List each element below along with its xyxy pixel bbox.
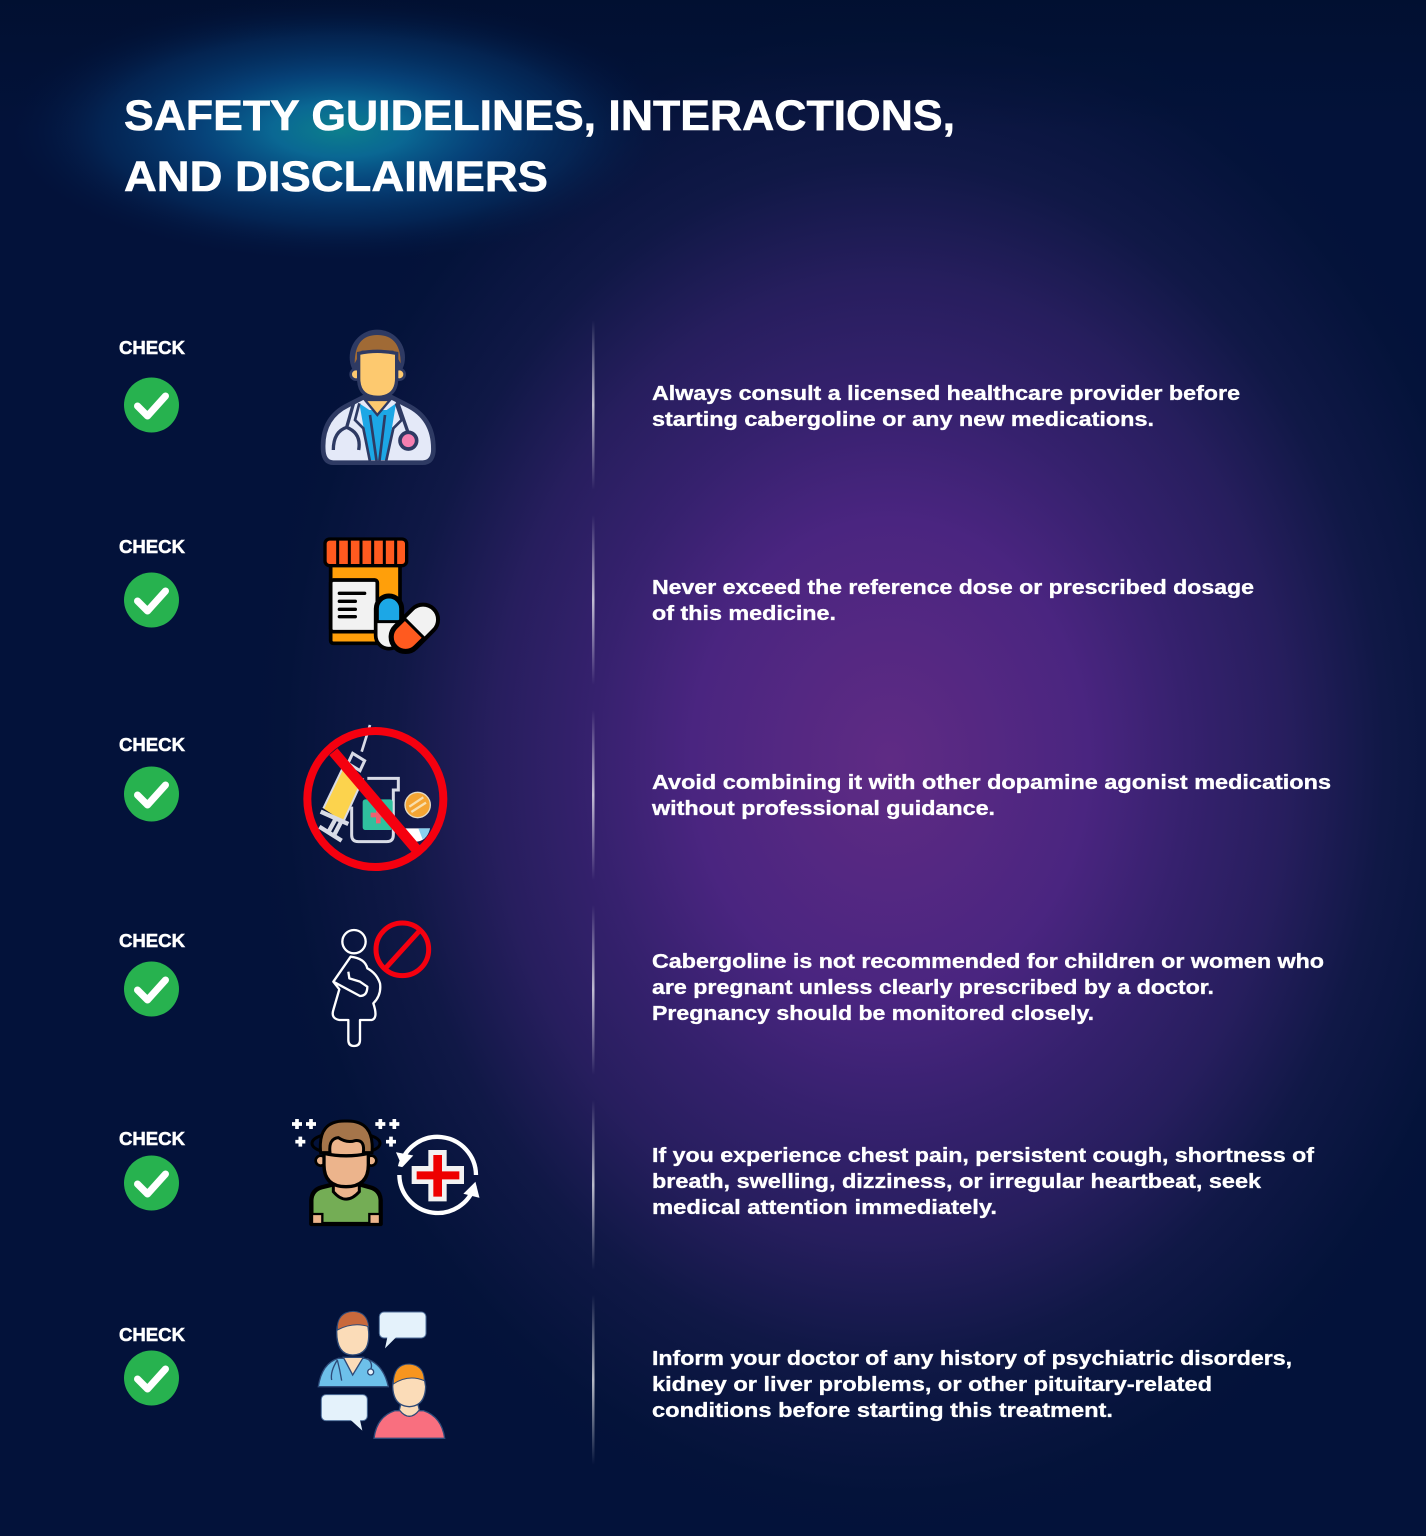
text: Never exceed the reference dose or prescribed dosage (652, 577, 1254, 599)
divider (592, 905, 594, 1075)
text (652, 577, 1254, 625)
text: without professional guidance. (651, 798, 995, 820)
icon: doctor (323, 330, 433, 463)
row 4: pregnancy (119, 905, 1324, 1075)
row 3: dopamine agonists (119, 710, 1331, 880)
text: Inform your doctor of any history of psychiatric disorders, (652, 1348, 1292, 1370)
divider (592, 515, 594, 685)
text: of this medicine. (652, 603, 836, 625)
text: kidney or liver problems, or other pituitary-related (652, 1374, 1212, 1396)
text: conditions before starting this treatment. (652, 1400, 1113, 1422)
check badge: CHECK (119, 1325, 185, 1345)
check badge: CHECK (119, 1129, 185, 1149)
check badge: CHECK (119, 537, 185, 557)
check badge: CHECK (119, 735, 185, 755)
row 2: dosage (119, 515, 1254, 685)
icon: dizzy man and medical cross (292, 1119, 478, 1224)
text (652, 383, 1240, 431)
text: If you experience chest pain, persistent cough, shortness of (652, 1145, 1314, 1167)
text (652, 1145, 1314, 1219)
check badge (119, 1325, 185, 1406)
text: Always consult a licensed healthcare provider before (652, 383, 1240, 405)
icon: pill bottle (325, 539, 444, 658)
text (652, 1348, 1292, 1422)
row 6: inform your doctor (119, 1295, 1292, 1465)
title: SAFETY GUIDELINES, INTERACTIONS, (124, 93, 955, 140)
icon: doctor and patient conversation (318, 1311, 445, 1438)
check badge: CHECK (119, 338, 185, 358)
row 5: seek medical attention (119, 1100, 1314, 1270)
divider (592, 1295, 594, 1465)
text: medical attention immediately. (652, 1197, 997, 1219)
text: starting cabergoline or any new medications. (652, 409, 1154, 431)
check badge (119, 537, 185, 628)
divider (592, 710, 594, 880)
icon: prohibited medications (307, 725, 443, 867)
title: AND DISCLAIMERS (124, 154, 548, 201)
check badge: CHECK (119, 931, 185, 951)
text (652, 951, 1324, 1025)
check badge (119, 1129, 185, 1210)
check badge (119, 338, 185, 432)
text: Cabergoline is not recommended for children or women who (652, 951, 1324, 973)
text: breath, swelling, dizziness, or irregular heartbeat, seek (652, 1171, 1262, 1193)
check badge (119, 735, 185, 822)
divider (592, 320, 594, 490)
check badge (119, 931, 185, 1016)
divider (592, 1100, 594, 1270)
text: are pregnant unless clearly prescribed by a doctor. (652, 977, 1214, 999)
text: Avoid combining it with other dopamine agonist medications (652, 772, 1331, 794)
text (651, 772, 1331, 820)
row 1: consult provider (119, 320, 1240, 490)
icon: pregnant woman prohibited (333, 923, 429, 1046)
title (124, 93, 955, 201)
text: Pregnancy should be monitored closely. (652, 1003, 1094, 1025)
